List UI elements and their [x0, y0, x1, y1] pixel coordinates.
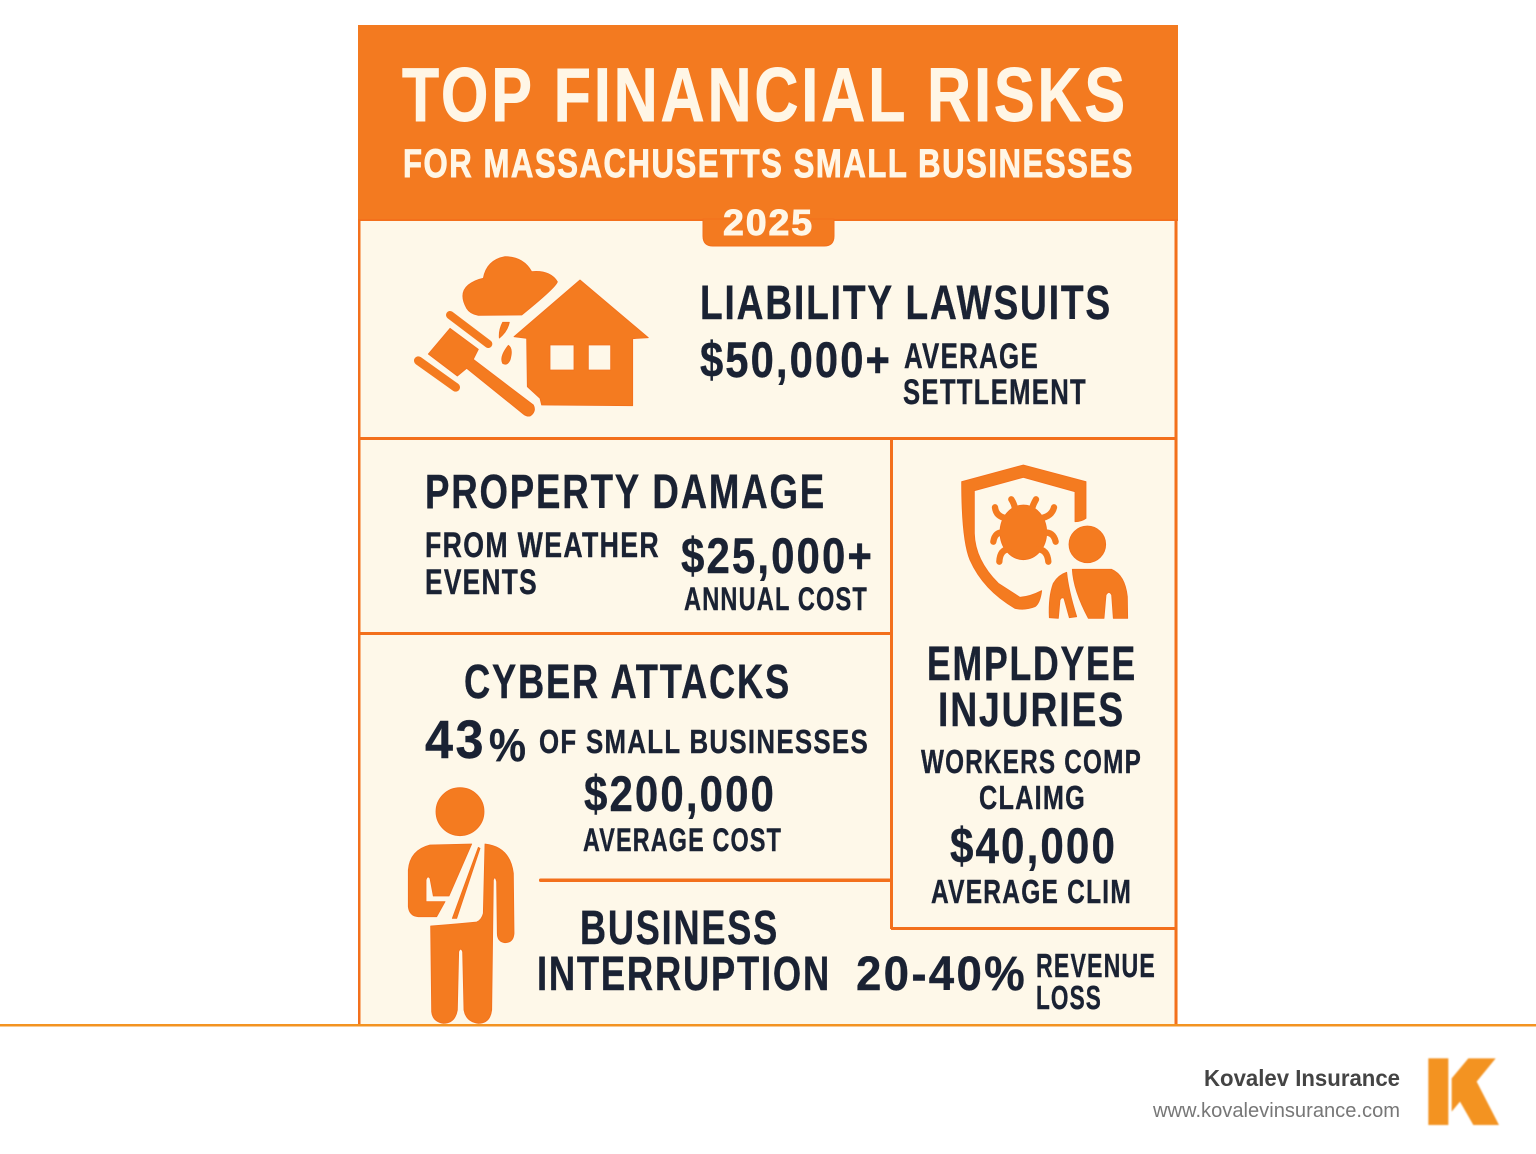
label: workers comp claim [921, 743, 1142, 816]
figure: 50,000 settlement: $50,000+ [700, 332, 892, 388]
label: revenue loss: LOSS [1036, 979, 1102, 1016]
icon: injured person with sling [408, 788, 514, 1023]
heading: business interruption [537, 902, 831, 1001]
heading: business interruption: INTERRUPTION [537, 948, 831, 1001]
figure: 200,000 average cost [583, 766, 782, 858]
heading: business interruption: BUSINESS [580, 902, 779, 955]
label: of small businesses: OF SMALL BUSINESSES [539, 723, 869, 760]
title: TOP FINANCIAL RISKS [402, 53, 1128, 138]
figure: 25,000 annual cost: $25,000+ [681, 528, 874, 584]
heading: employee injuries [927, 638, 1137, 737]
header banner [358, 25, 1178, 221]
figure: 200,000 average cost: AVERAGE COST [583, 822, 782, 858]
label: from weather events: EVENTS [425, 563, 538, 602]
figure: 200,000 average cost: $200,000 [584, 766, 776, 822]
heading: employee injuries: EMPLDYEE [927, 638, 1137, 691]
label: average settlement: AVERAGE [904, 337, 1039, 376]
figure: 43 percent: 43 [425, 710, 486, 770]
year badge [703, 202, 834, 246]
icon: K logo [1428, 1058, 1499, 1125]
figure: 40,000 average claim [931, 818, 1132, 910]
heading: liability lawsuits: LIABILITY LAWSUITS [700, 277, 1112, 330]
figure: 43 percent [425, 710, 528, 771]
icon: gavel, cloud and house [418, 257, 648, 416]
label: from weather events: FROM WEATHER [425, 526, 660, 565]
figure: 25,000 annual cost: ANNUAL COST [684, 581, 868, 617]
year badge: 2025 [723, 202, 814, 243]
label: average settlement [903, 337, 1087, 412]
subtitle: FOR MASSACHUSETTS SMALL BUSINESSES [403, 142, 1134, 186]
label: revenue loss: REVENUE [1036, 947, 1156, 984]
label: average settlement: SETTLEMENT [903, 373, 1087, 412]
footer [0, 1024, 1536, 1154]
figure: 43 percent: % [489, 719, 528, 771]
label: workers comp claim: WORKERS COMP [921, 743, 1142, 780]
heading: employee injuries: INJURIES [938, 684, 1125, 737]
heading: property damage: PROPERTY DAMAGE [425, 466, 826, 519]
label: workers comp claim: CLAIMG [979, 779, 1086, 816]
infographic card [358, 25, 1178, 1025]
website: www.kovalevinsurance.com [1152, 1100, 1400, 1122]
label: from weather events [425, 526, 660, 602]
figure: 40,000 average claim: $40,000 [950, 818, 1117, 874]
figure: 20-40 percent: 20-40% [856, 948, 1027, 1001]
brand name: Kovalev Insurance [1204, 1065, 1400, 1091]
label: revenue loss [1036, 947, 1156, 1016]
figure: 40,000 average claim: AVERAGE CLIM [931, 873, 1132, 910]
figure: 25,000 annual cost [681, 528, 874, 617]
icon: shield with bug and person [962, 465, 1128, 618]
heading: cyber attacks: CYBER ATTACKS [464, 656, 791, 709]
